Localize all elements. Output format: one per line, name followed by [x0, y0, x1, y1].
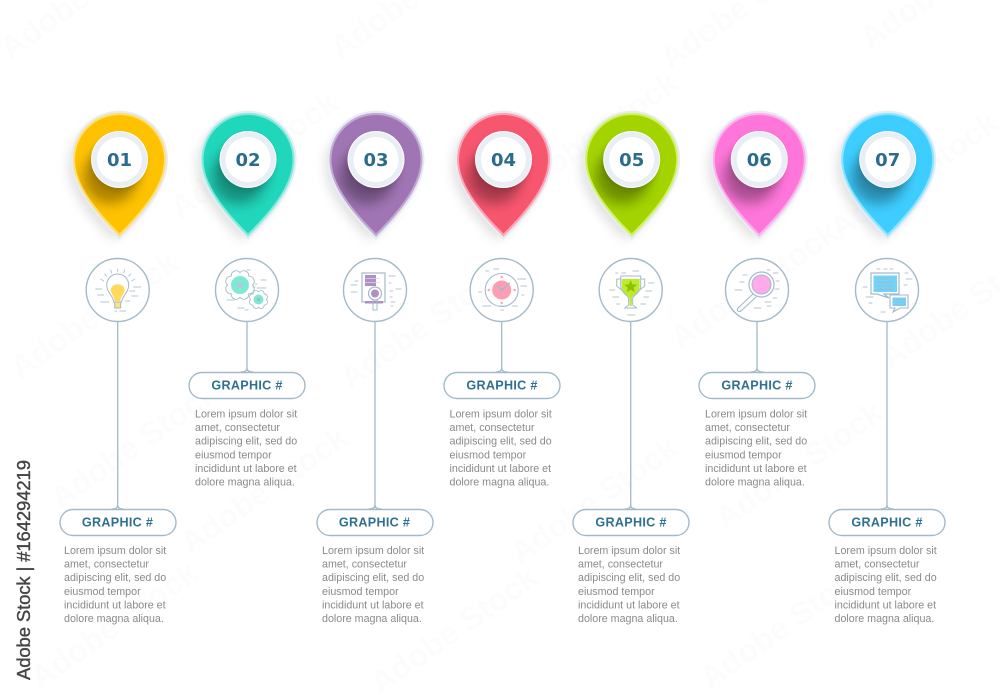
text block 2: incididunt ut labore et	[195, 463, 297, 475]
text block 2: dolore magna aliqua.	[195, 476, 295, 488]
connector 06	[751, 321, 763, 372]
background watermark: Adobe Stock	[693, 554, 874, 695]
connector 01	[112, 321, 123, 509]
text block 6: adipiscing elit, sed do	[705, 436, 807, 448]
text block 1: amet, consectetur	[64, 559, 149, 571]
icon: trophy	[599, 258, 662, 322]
text block 6: dolore magna aliqua.	[705, 476, 805, 488]
pin 06	[709, 111, 808, 240]
text block 3: incididunt ut labore et	[322, 599, 424, 611]
text block 7: dolore magna aliqua.	[834, 613, 934, 625]
text block 4: amet, consectetur	[450, 422, 535, 434]
background watermark: Adobe Stock	[43, 374, 224, 516]
pin 06: 06	[747, 150, 772, 171]
text block 1: eiusmod tempor	[64, 586, 141, 598]
label: GRAPHIC 4	[444, 372, 560, 398]
text block 4: eiusmod tempor	[450, 449, 527, 461]
background watermark: Adobe Stock	[23, 554, 204, 695]
pin 01: 01	[107, 150, 132, 171]
connector 04	[496, 321, 507, 372]
label: GRAPHIC 7: GRAPHIC #	[851, 516, 923, 530]
text block 5: Lorem ipsum dolor sit	[578, 545, 680, 557]
pin 07	[837, 111, 936, 240]
connector 02	[241, 321, 253, 372]
label: GRAPHIC 2	[189, 372, 305, 398]
text block 4: incididunt ut labore et	[450, 463, 551, 475]
text block 2: Lorem ipsum dolor sit	[195, 408, 297, 420]
icon: gears	[216, 258, 278, 322]
text block 2: eiusmod tempor	[195, 449, 272, 461]
text block 7: incididunt ut labore et	[834, 599, 936, 611]
icon: speech bubbles	[856, 258, 918, 322]
pin 03: 03	[363, 150, 389, 171]
connector 03	[369, 321, 381, 509]
text block 7: amet, consectetur	[834, 559, 920, 571]
icon: magnifier	[726, 258, 788, 322]
text block 5: dolore magna aliqua.	[578, 613, 678, 625]
text block 3: adipiscing elit, sed do	[322, 572, 424, 584]
text block 7: adipiscing elit, sed do	[834, 572, 937, 584]
text block 4: adipiscing elit, sed do	[450, 436, 552, 448]
text block 3: Lorem ipsum dolor sit	[322, 545, 424, 557]
pin 04: 04	[491, 150, 516, 171]
text block 3: amet, consectetur	[322, 559, 407, 571]
text block 3: eiusmod tempor	[322, 586, 399, 598]
label: GRAPHIC 2: GRAPHIC #	[211, 378, 283, 392]
label: GRAPHIC 1	[60, 510, 176, 536]
background watermark: Adobe Stock	[503, 64, 684, 206]
side credit text: Adobe Stock | #164294219	[13, 460, 34, 680]
pin 04	[453, 111, 552, 240]
pin 01	[69, 111, 168, 240]
icon: clock	[470, 258, 533, 322]
pin 05	[581, 111, 680, 240]
background watermark: Adobe Stock	[823, 104, 1000, 246]
text block 1: dolore magna aliqua.	[64, 613, 164, 625]
label: GRAPHIC 3	[317, 510, 433, 536]
label: GRAPHIC 4: GRAPHIC #	[466, 378, 538, 392]
background watermark: Adobe Stock	[163, 84, 344, 226]
text block 5: adipiscing elit, sed do	[578, 572, 680, 584]
text block 2: adipiscing elit, sed do	[195, 436, 297, 448]
label: GRAPHIC 6: GRAPHIC #	[721, 378, 793, 392]
pin 03	[326, 111, 425, 240]
text block 1: Lorem ipsum dolor sit	[64, 545, 166, 557]
connector 07	[881, 321, 893, 509]
text block 3: dolore magna aliqua.	[322, 613, 422, 625]
text block 4: dolore magna aliqua.	[450, 476, 549, 488]
background watermark: Adobe Stock	[503, 429, 684, 571]
text block 5: eiusmod tempor	[578, 586, 655, 598]
label: GRAPHIC 3: GRAPHIC #	[339, 516, 410, 530]
pin 02	[198, 111, 297, 240]
pin 07: 07	[875, 150, 900, 171]
background watermark: Adobe Stock	[663, 214, 844, 356]
background watermark: Adobe Stock	[173, 419, 354, 561]
label: GRAPHIC 1: GRAPHIC #	[82, 516, 153, 530]
text block 1: adipiscing elit, sed do	[64, 572, 166, 584]
background watermark: Adobe Stock	[3, 244, 184, 386]
label: GRAPHIC 6	[699, 372, 815, 398]
label: GRAPHIC 5: GRAPHIC #	[595, 516, 667, 530]
text block 6: Lorem ipsum dolor sit	[705, 408, 807, 420]
text block 6: amet, consectetur	[705, 422, 790, 434]
text block 5: incididunt ut labore et	[578, 599, 680, 611]
connector 05	[625, 321, 636, 509]
text block 1: incididunt ut labore et	[64, 599, 166, 611]
pin 05: 05	[619, 150, 644, 171]
text block 2: amet, consectetur	[195, 422, 280, 434]
label: GRAPHIC 5	[573, 510, 689, 536]
text block 7: Lorem ipsum dolor sit	[834, 545, 937, 557]
icon: light bulb	[86, 258, 149, 322]
background watermark: Adobe Stock	[333, 254, 514, 396]
text block 7: eiusmod tempor	[834, 586, 912, 598]
text block 4: Lorem ipsum dolor sit	[450, 408, 552, 420]
text block 5: amet, consectetur	[578, 559, 663, 571]
pin 02: 02	[235, 150, 261, 171]
text block 6: eiusmod tempor	[705, 449, 782, 461]
text block 6: incididunt ut labore et	[705, 463, 807, 475]
icon: document	[344, 258, 406, 322]
background watermark: Adobe Stock	[708, 394, 889, 536]
label: GRAPHIC 7	[829, 510, 945, 536]
